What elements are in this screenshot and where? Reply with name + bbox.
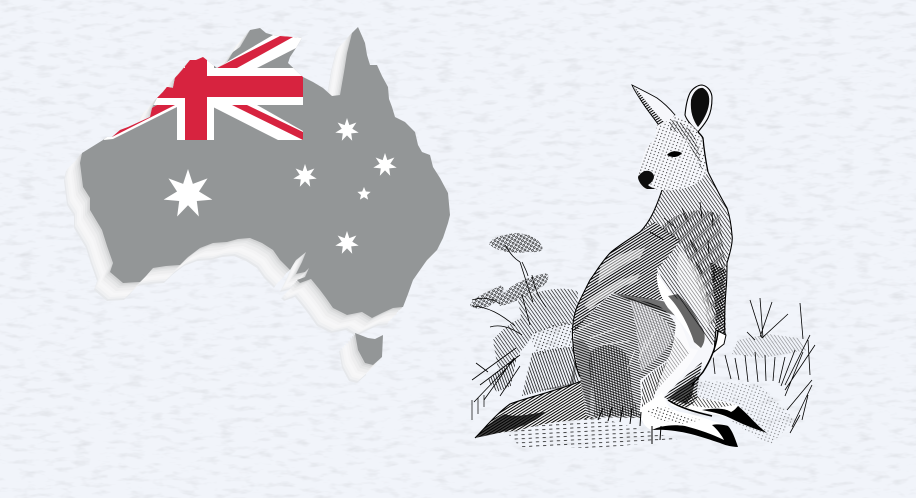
southern cross stars (164, 118, 397, 254)
nose (638, 171, 656, 189)
rear foot (670, 385, 767, 433)
map cut-out shadow (64, 28, 448, 383)
plants behind the kangaroo (470, 233, 580, 420)
union jack canton (100, 35, 305, 140)
kangaroo engraving (470, 85, 815, 448)
map of Australia with flag (64, 27, 450, 383)
tail (475, 380, 598, 438)
hand (714, 330, 726, 352)
land silhouette (80, 27, 450, 365)
haunch hatching (573, 293, 680, 418)
body (572, 172, 732, 418)
upper back hatching (572, 222, 680, 335)
right ear (685, 85, 712, 132)
grass and ground on the right (500, 298, 815, 448)
foreleg (657, 272, 705, 348)
neck and chest (640, 172, 732, 345)
belly and front leg (598, 316, 738, 447)
left ear (632, 85, 675, 127)
head and ears (632, 85, 712, 190)
eye (667, 151, 682, 157)
face (638, 115, 708, 190)
